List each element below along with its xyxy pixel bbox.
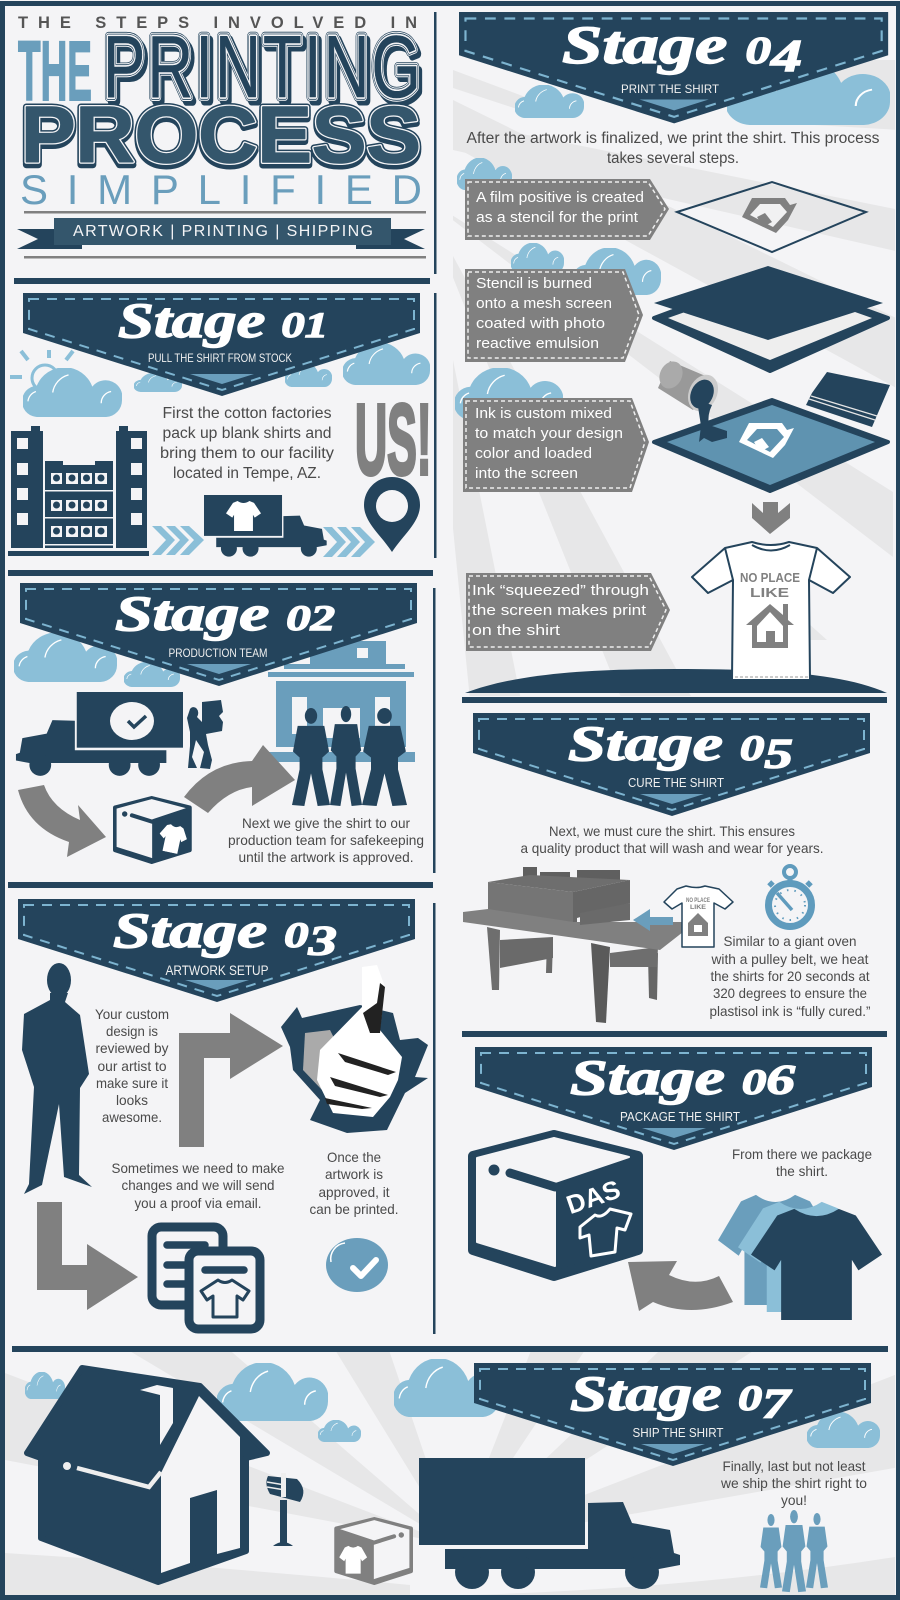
icon: box with shirt (115, 798, 190, 862)
banner: stage 07: Stage 0 (570, 1365, 756, 1421)
text: once approved: artwork is (325, 1166, 383, 1182)
icon: squeegee (806, 372, 890, 427)
text: ship: you! (781, 1492, 807, 1508)
title: the: THE (18, 24, 92, 118)
arrow: down and right (37, 1202, 138, 1310)
text: package: From there we package (732, 1146, 872, 1162)
banner: stage 07: SHIP THE SHIRT (632, 1425, 724, 1440)
icon: ink can pour (655, 358, 727, 442)
text: production team: production team for safekeeping (228, 832, 424, 848)
callout: film positive: as a stencil for the print (476, 209, 639, 226)
text: cotton factories: bring them to our facility (160, 445, 334, 462)
text: giant oven: with a pulley belt, we heat (711, 951, 869, 967)
icon: grey box (336, 1519, 411, 1583)
text: once approved: Once the (327, 1149, 381, 1165)
callout: ink: Ink is custom mixed (475, 405, 612, 422)
text: cotton factories: pack up blank shirts and (162, 425, 332, 442)
title: process: PROCESS (21, 93, 421, 182)
icon: mailbox (266, 1473, 303, 1546)
title: process: PROCESS (21, 90, 421, 179)
text: ship (720, 1458, 867, 1508)
panel: stage 4 (454, 12, 891, 693)
callout: squeezed: on the shirt (472, 622, 561, 639)
icon: chevrons right (323, 527, 375, 557)
banner: stage 02: PRODUCTION TEAM (168, 646, 268, 660)
text: once approved: can be printed. (310, 1201, 398, 1217)
banner: stage 05: CURE THE SHIRT (628, 775, 724, 790)
text: custom design: our artist to (98, 1058, 167, 1074)
panel: stage 7 sun rays background (5, 1352, 895, 1595)
text: package (732, 1146, 872, 1179)
text: giant oven (710, 933, 871, 1019)
banner: stage 07 (474, 1363, 871, 1466)
banner: stage 06: Stage 06 (570, 1049, 795, 1105)
title: process: PROCESS (21, 90, 421, 179)
icon: location pin (364, 477, 420, 552)
text: giant oven: the shirts for 20 seconds at (710, 968, 870, 984)
US!: US! (355, 385, 432, 496)
text: giant oven: Similar to a giant oven (724, 933, 856, 949)
text: giant oven: plastisol ink is “fully cured.” (710, 1003, 871, 1019)
rule lines (24, 211, 426, 258)
panel: stage 4 sun rays background (420, 60, 900, 700)
banner: stage 03: ARTWORK SETUP (166, 962, 268, 978)
callout: ink: to match your design (475, 425, 623, 442)
text: cotton factories (160, 405, 334, 482)
text: once approved: approved, it (318, 1184, 390, 1200)
text: sometimes (112, 1160, 285, 1211)
arrow: down (752, 502, 790, 534)
callout: stencil: reactive emulsion (476, 335, 599, 352)
title: printing: PRINTING (103, 19, 423, 117)
icon: delivery truck (16, 692, 183, 776)
text: sometimes: changes and we will send (122, 1177, 274, 1193)
icon: stopwatch (768, 866, 812, 926)
icon: check badge (326, 1238, 388, 1292)
text: custom design: design is (106, 1023, 158, 1039)
banner: stage 04: PRINT THE SHIRT (621, 82, 720, 96)
panel: stage 7 (25, 1358, 880, 1592)
callout: squeezed (466, 573, 670, 651)
banner: stage 04: Stage 0 (562, 15, 765, 75)
text: custom design: make sure it (96, 1075, 168, 1091)
title: printing: PRINTING (103, 19, 423, 117)
ground ellipse (465, 669, 887, 693)
text: production team: Next we give the shirt to our (242, 815, 410, 831)
text: cotton factories: First the cotton factories (162, 405, 332, 422)
icon: sun (10, 350, 73, 391)
icon: printed shirt (692, 542, 850, 680)
banner: stage 01: Stage 01 (118, 292, 328, 348)
text: intro: After the artwork is finalized, we print the shirt. This process (466, 130, 880, 147)
callout: film positive (465, 179, 669, 240)
icon: printed shirt: NO PLACE (740, 570, 800, 585)
title: printing: PRINTING (103, 19, 423, 117)
banner: stage 02: Stage 02 (115, 585, 335, 641)
icon: chevrons left (152, 526, 204, 555)
icon: small shirt (664, 886, 733, 947)
arrow: shirts to box (628, 1261, 733, 1311)
banner: stage 04: 4 (770, 30, 802, 81)
banner: stage 07: 7 (762, 1382, 793, 1428)
icon: stacked shirts (718, 1195, 882, 1320)
banner: stage 03 (18, 899, 415, 1002)
clouds (22, 342, 430, 417)
icon: building (267, 641, 415, 762)
panel: stage 5 (463, 713, 871, 1023)
panel: stage 6 (473, 1047, 882, 1320)
text: cure intro (520, 823, 824, 856)
icon: house (27, 1368, 267, 1582)
banner: stage 01 (23, 292, 420, 396)
panel: stage 3 (18, 899, 428, 1329)
callout: stencil: coated with photo (476, 315, 605, 332)
icon: proof documents (152, 1227, 260, 1329)
ribbon (17, 218, 425, 249)
text: cotton factories: located in Tempe, AZ. (173, 465, 321, 482)
icon: thumbs up through torn paper (281, 965, 428, 1133)
clouds (25, 1358, 880, 1448)
text: custom design: reviewed by (96, 1040, 168, 1056)
icon: small shirt: NO PLACE (686, 898, 710, 904)
callout: stencil: Stencil is burned (476, 275, 592, 292)
banner: stage 06 (475, 1047, 872, 1150)
title: printing: PRINTING (106, 23, 426, 121)
callout: ink (463, 398, 649, 492)
icon: curing machine (463, 867, 683, 1023)
panel: stage 2 (13, 583, 424, 865)
icon: screen with ink (654, 400, 888, 491)
callout: stencil: onto a mesh screen (476, 295, 612, 312)
text: sometimes: you a proof via email. (134, 1195, 262, 1211)
arrow: up and right (179, 1013, 283, 1147)
text: custom design (95, 1006, 169, 1125)
clouds (13, 632, 180, 687)
callout: film positive: A film positive is created (476, 189, 644, 206)
banner: stage 06: PACKAGE THE SHIRT (620, 1109, 740, 1124)
banner: stage 05 (473, 713, 870, 816)
text: giant oven: 320 degrees to ensure the (713, 985, 867, 1001)
text: intro (466, 130, 880, 167)
icon: factory (8, 426, 149, 556)
icon: DAS box (473, 1135, 638, 1276)
panel: stage 1 (8, 292, 432, 557)
icon: small shirt: LIKE (690, 905, 706, 911)
banner: stage 05: Stage 0 (568, 715, 758, 771)
title block (17, 14, 426, 258)
icon: large truck (419, 1458, 680, 1589)
icon: film diamond (677, 182, 866, 252)
text: custom design: looks (116, 1092, 148, 1108)
callout: stencil (465, 269, 643, 362)
banner: stage 03: 3 (307, 919, 337, 965)
title: process: PROCESS (21, 90, 421, 179)
text: custom design: awesome. (102, 1109, 162, 1125)
banner: stage 02 (20, 583, 417, 686)
callout: squeezed: the screen makes print (472, 602, 647, 619)
icon: delivery man (187, 700, 223, 769)
arrow: into oven (633, 909, 673, 931)
text: package: the shirt. (776, 1163, 828, 1179)
ribbon: ARTWORK | PRINTING | SHIPPING (73, 223, 373, 240)
text: production team (228, 815, 424, 865)
title: simplified: SIMPLIFIED (20, 166, 422, 213)
callout: ink: color and loaded (475, 445, 592, 462)
title: printing: PRINTING (103, 19, 423, 117)
figures: customers (760, 1510, 828, 1592)
clouds (454, 56, 891, 420)
text: cure intro: a quality product that will wash and wear for years. (520, 840, 824, 856)
icon: truck with shirt (204, 495, 327, 557)
icon: printed shirt: LIKE (750, 585, 789, 600)
text: intro: takes several steps. (607, 150, 739, 167)
text: ship: Finally, last but not least (722, 1458, 866, 1474)
figure: artist (22, 963, 92, 1194)
title: printing: PRINTING (103, 19, 423, 117)
title: the steps involved in: THE STEPS INVOLVED IN (18, 14, 417, 32)
icon: mesh screen stack (654, 266, 888, 371)
text: once approved (310, 1149, 398, 1217)
arrow: box to team (184, 745, 295, 813)
text: production team: until the artwork is approved. (238, 849, 414, 865)
callout: squeezed: Ink “squeezed” through (472, 582, 649, 599)
text: ship: we ship the shirt right to (720, 1475, 867, 1491)
text: custom design: Your custom (95, 1006, 169, 1022)
text: sometimes: Sometimes we need to make (112, 1160, 285, 1176)
callout: ink: into the screen (475, 465, 578, 482)
banner: stage 05: 5 (764, 732, 793, 778)
text: cure intro: Next, we must cure the shirt. This ensures (549, 823, 795, 839)
figures: production team (292, 706, 407, 806)
arrow: truck to box (18, 785, 106, 857)
banner: stage 01: PULL THE SHIRT FROM STOCK (148, 351, 292, 365)
banner: stage 03: Stage 0 (113, 902, 302, 958)
icon: DAS box: DAS (562, 1174, 624, 1220)
banner: stage 04 (459, 12, 888, 123)
